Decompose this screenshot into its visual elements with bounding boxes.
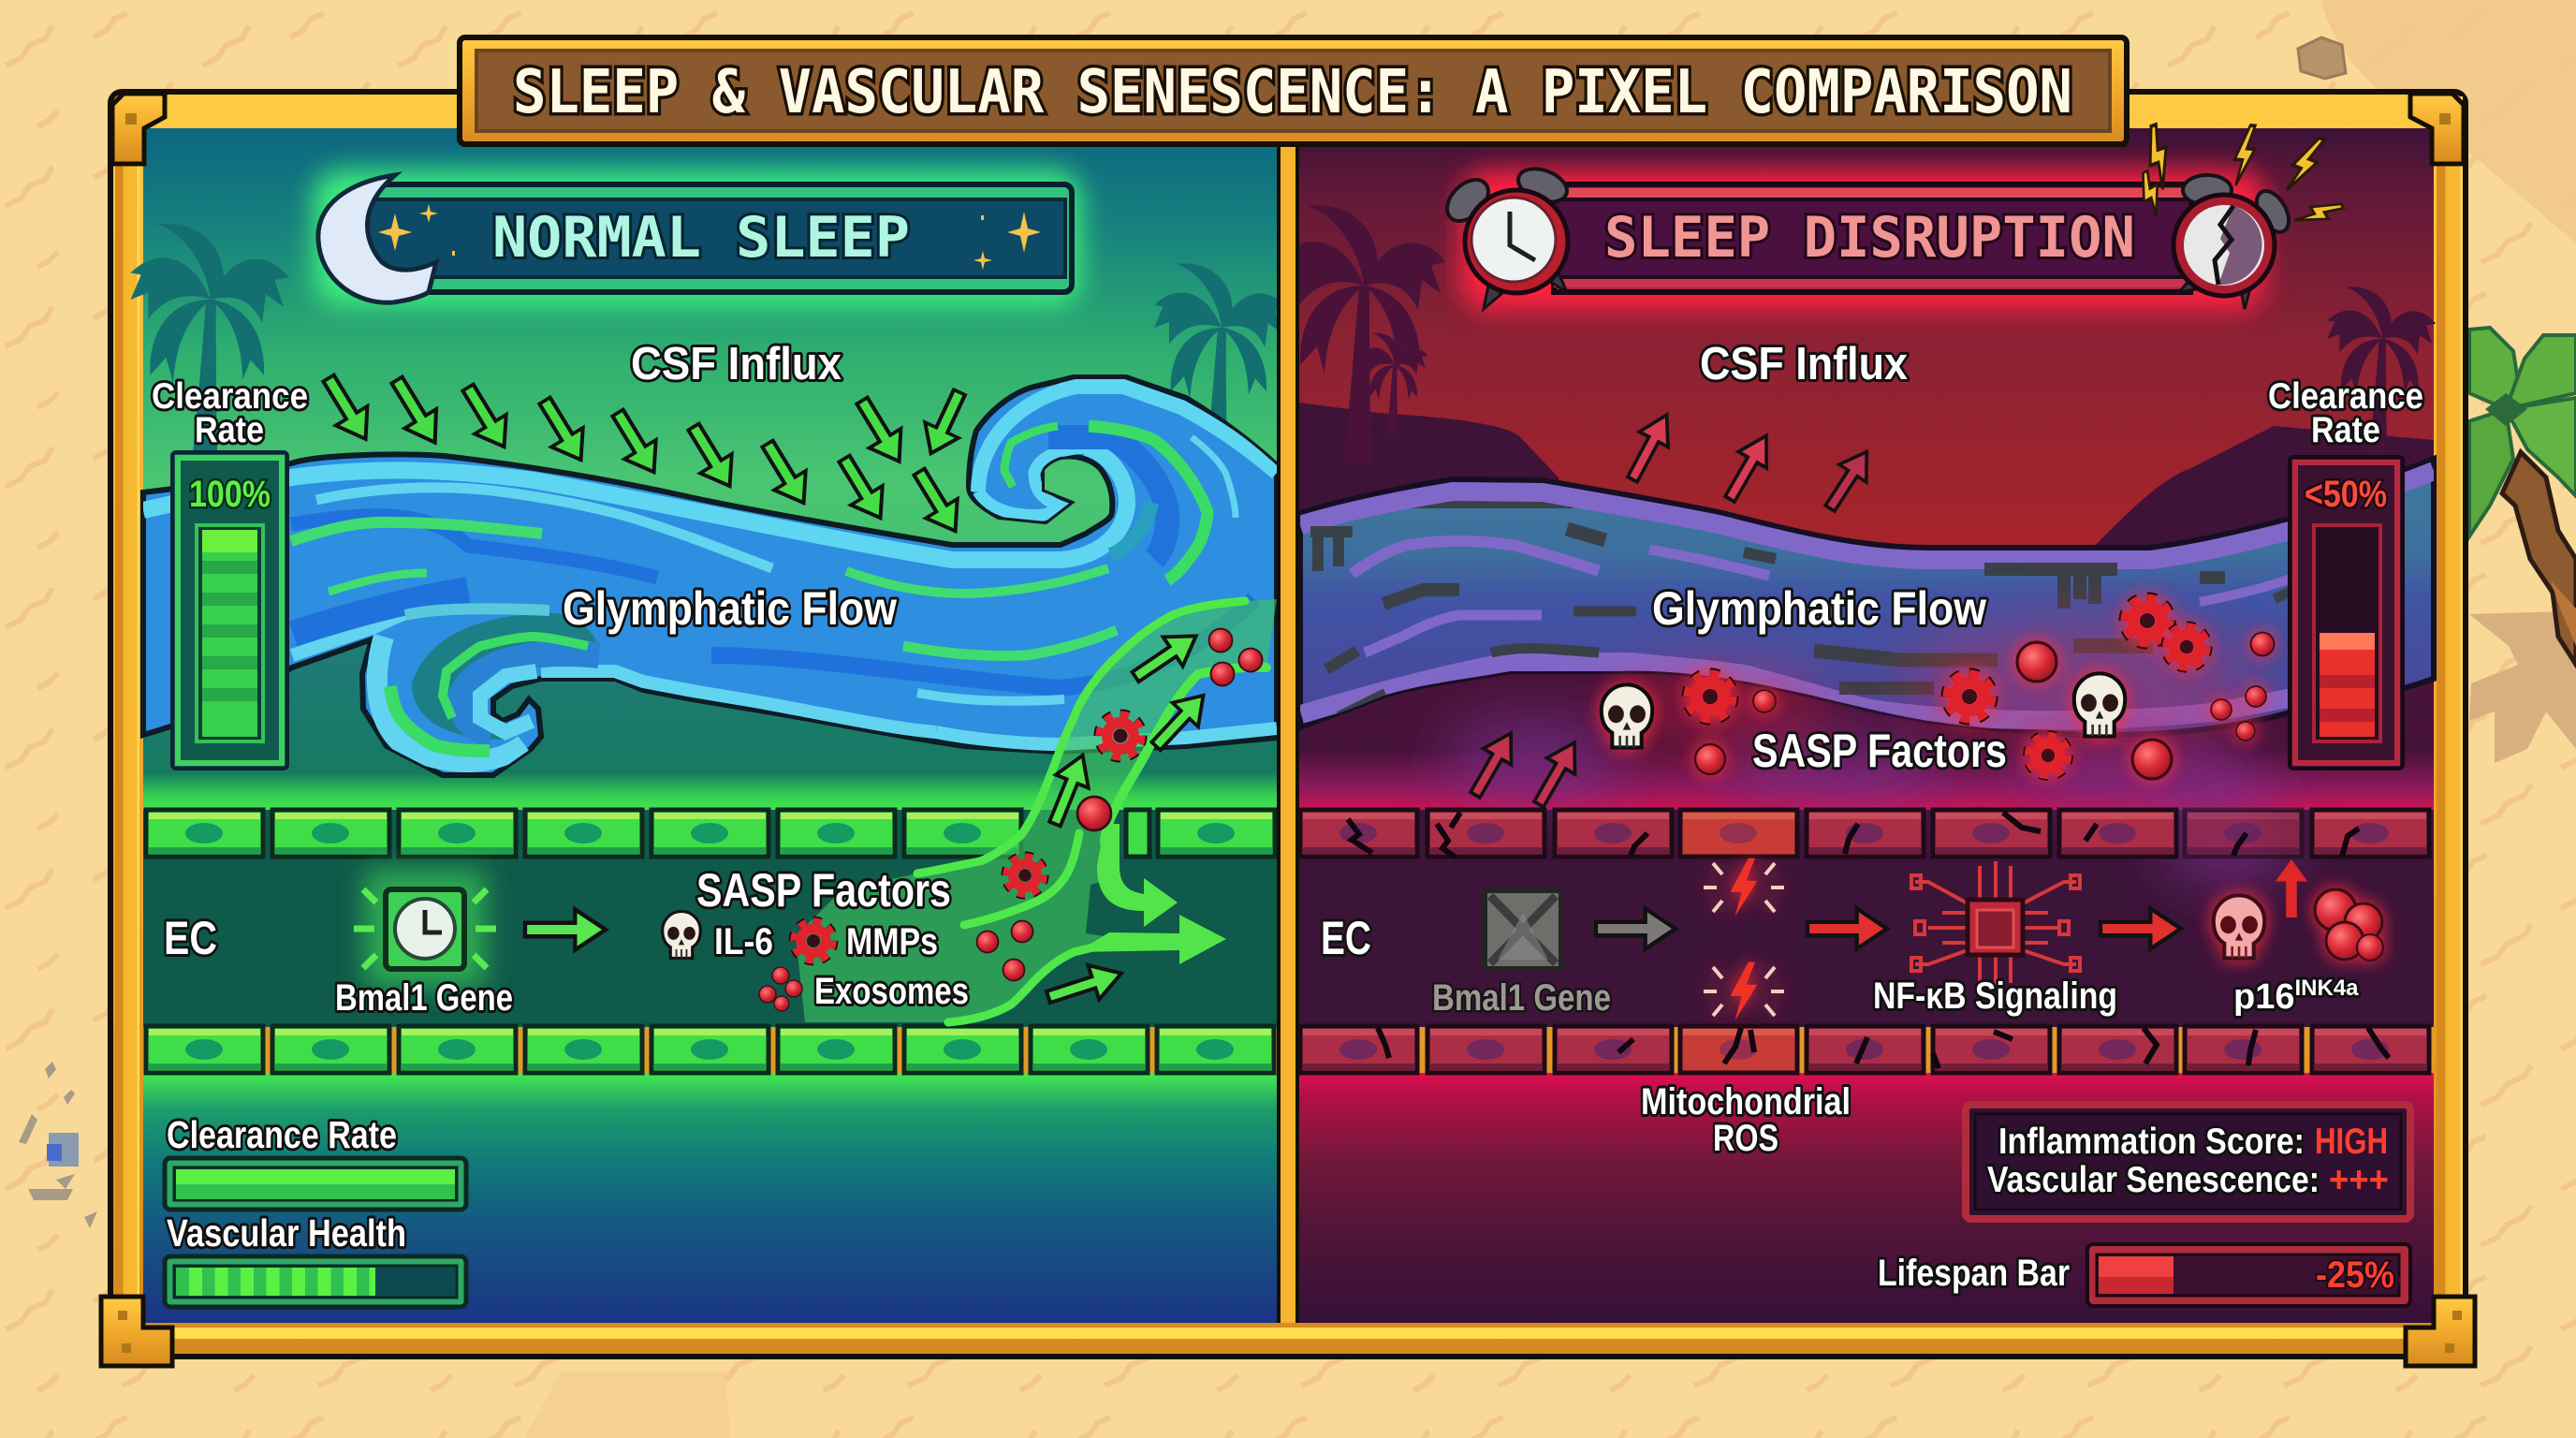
red arrow	[1808, 908, 1887, 949]
inflammation score box: HIGH	[2315, 1122, 2388, 1162]
Vascular Health stat bar: Vascular Health	[167, 1211, 406, 1255]
inflammation score box	[1966, 1105, 2410, 1219]
inflammation score box: Inflammation Score:	[1998, 1122, 2305, 1162]
EC label: EC	[164, 912, 217, 964]
palm silhouettes	[131, 224, 1287, 470]
legend: Exosomes: Exosomes	[814, 971, 969, 1012]
icon: ROS spark lower	[1704, 962, 1784, 1020]
glymphatic wave	[143, 377, 1277, 775]
lifespan bar: Lifespan Bar	[1878, 1253, 2070, 1294]
icon: Bmal1 gene clock	[354, 871, 496, 987]
gauge label: Clearance	[152, 376, 308, 417]
Mitochondrial ROS label: ROS	[1713, 1118, 1778, 1159]
p16 label: INK4a	[2294, 976, 2359, 1001]
weak CSF influx arrows	[1618, 407, 1881, 517]
red arrow	[2100, 908, 2181, 949]
clearance gauge: 100%	[189, 474, 271, 515]
vessel wall bottom	[146, 1026, 1274, 1073]
icon: alarm lightning bolts	[2131, 124, 2345, 234]
lifespan bar	[1878, 1244, 2410, 1306]
Clearance Rate stat bar: Clearance Rate	[167, 1113, 397, 1156]
arrow: Bmal1 to SASP	[525, 909, 606, 950]
banner: normal sleep	[314, 170, 1081, 306]
gauge label: Rate	[195, 410, 264, 450]
Bmal1 Gene muted label: Bmal1 Gene	[1432, 977, 1611, 1019]
big exit arrow	[1076, 915, 1226, 964]
grey arrow	[1596, 908, 1676, 949]
Glymphatic Flow label: Glymphatic Flow	[1652, 582, 1986, 635]
CSF Influx label: CSF Influx	[631, 339, 842, 389]
legend: IL-6: IL-6	[714, 921, 773, 962]
icon: ROS spark upper	[1704, 858, 1784, 917]
up arrow	[2276, 859, 2307, 917]
debris on sand	[19, 1062, 97, 1228]
legend: MMPs: MMPs	[846, 921, 938, 962]
NF-kB label: NF-κB Signaling	[1873, 976, 2117, 1017]
palm shadow on sand	[2469, 611, 2576, 763]
Mitochondrial ROS label: Mitochondrial	[1641, 1081, 1851, 1123]
lifespan bar: -25%	[2316, 1255, 2394, 1296]
icon: cracked alarm clock	[2174, 175, 2295, 309]
icon: crescent moon	[318, 175, 436, 302]
cracked vessel wall top	[1300, 810, 2429, 858]
EC label: EC	[1321, 912, 1371, 964]
panel: sleep disruption	[1280, 124, 2436, 1323]
clearance gauge	[2290, 457, 2403, 769]
icon: alarm clock	[1440, 163, 1572, 309]
Vascular Health stat bar	[165, 1211, 466, 1307]
Mitochondrial ROS label	[1641, 1081, 1851, 1159]
gauge label	[2268, 376, 2423, 450]
SASP particles	[1602, 599, 2275, 779]
icon: NF-kB chip	[1911, 861, 2080, 988]
divider	[1277, 128, 1299, 1323]
sluggish wave	[1300, 459, 2434, 735]
banner: normal sleep: NORMAL SLEEP	[492, 205, 910, 271]
p16 label: p16	[2233, 977, 2294, 1017]
sand palm tree	[2469, 328, 2576, 665]
rising leakage arrows	[1461, 726, 1588, 813]
panel: normal sleep	[131, 128, 1287, 1323]
left panel background	[143, 128, 1279, 1323]
Bmal1 Gene label: Bmal1 Gene	[335, 977, 513, 1019]
CSF influx arrows	[313, 369, 976, 540]
cracked vessel wall bottom	[1300, 1026, 2429, 1073]
legend: IL-6	[663, 911, 773, 962]
SASP clearance stream	[796, 599, 1277, 1022]
title: SLEEP & VASCULAR SENESCENCE: A PIXEL COMPARISON	[513, 58, 2072, 127]
SASP Factors label: SASP Factors	[1752, 725, 2007, 777]
clearance gauge: <50%	[2305, 474, 2387, 515]
gauge label	[152, 376, 308, 450]
SASP particles in stream	[977, 629, 1262, 981]
inflammation score box: Vascular Senescence:	[1987, 1160, 2320, 1200]
banner: sleep disruption	[1440, 124, 2345, 311]
vessel wall top	[146, 810, 1275, 857]
icon: p16 skull	[2214, 895, 2264, 959]
CSF Influx label: CSF Influx	[1700, 339, 1908, 389]
clearance stream arrows	[1039, 622, 1216, 1014]
title plaque	[460, 37, 2127, 147]
rock on sand	[2298, 37, 2346, 79]
icon: silenced Bmal1 crate	[1485, 890, 1561, 969]
banner: sleep disruption: SLEEP DISRUPTION	[1604, 205, 2135, 271]
toxic fog	[1442, 618, 2293, 885]
gauge label: Rate	[2311, 410, 2380, 450]
Glymphatic Flow label: Glymphatic Flow	[563, 582, 897, 635]
icon: senescent cell cluster	[2315, 889, 2383, 961]
inflammation score box: +++	[2329, 1160, 2389, 1200]
clearance gauge	[172, 452, 287, 769]
hills and palm silhouettes	[1280, 205, 2436, 562]
legend: Exosomes	[759, 967, 969, 1012]
legend: MMPs	[795, 921, 938, 962]
gauge label: Clearance	[2268, 376, 2423, 417]
right panel background	[1298, 128, 2434, 1323]
stars	[378, 204, 1041, 270]
Clearance Rate stat bar	[165, 1113, 466, 1210]
SASP Factors heading: SASP Factors	[696, 864, 951, 917]
